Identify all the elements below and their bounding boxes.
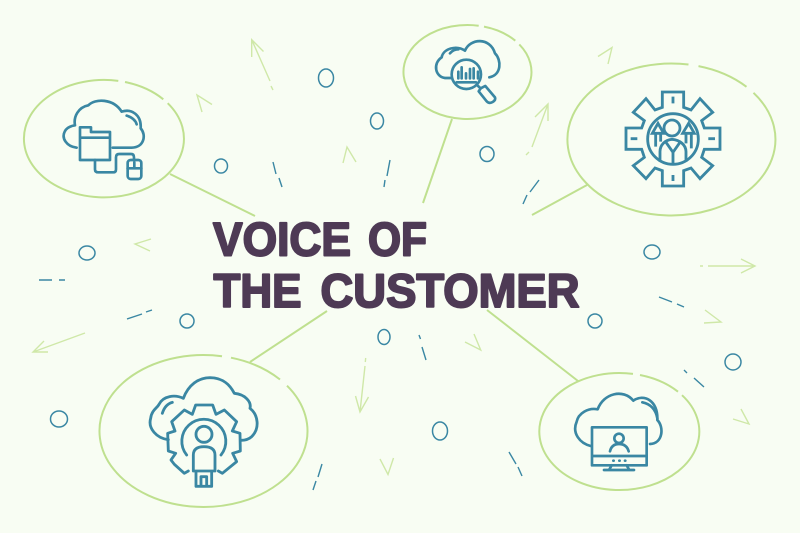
icon: gear with person and arrows xyxy=(626,92,720,186)
icon: cloud with folder and mouse xyxy=(64,101,144,179)
small decorative dashes xyxy=(39,160,704,490)
panel: top-centre bubble with cloud search icon xyxy=(403,25,531,119)
icon: cloud with monitor and user xyxy=(575,394,661,470)
title: THE xyxy=(214,264,302,317)
icon: cloud with magnifier and bars xyxy=(436,41,499,103)
panel: top-right bubble with gear and person icon xyxy=(567,63,775,215)
decorative green arrows and chevrons xyxy=(33,40,755,474)
title xyxy=(213,213,580,317)
panel: top-left bubble with cloud folder icon xyxy=(24,80,184,197)
small decorative circles xyxy=(50,69,741,440)
panel: bottom-right bubble with cloud monitor icon xyxy=(539,373,699,490)
title: VOICE xyxy=(213,213,351,266)
icon: cloud, gear and person xyxy=(150,378,257,486)
panel: bottom-left bubble with cloud gear person icon xyxy=(99,355,307,507)
title: OF xyxy=(368,213,427,266)
title: CUSTOMER xyxy=(320,264,580,317)
